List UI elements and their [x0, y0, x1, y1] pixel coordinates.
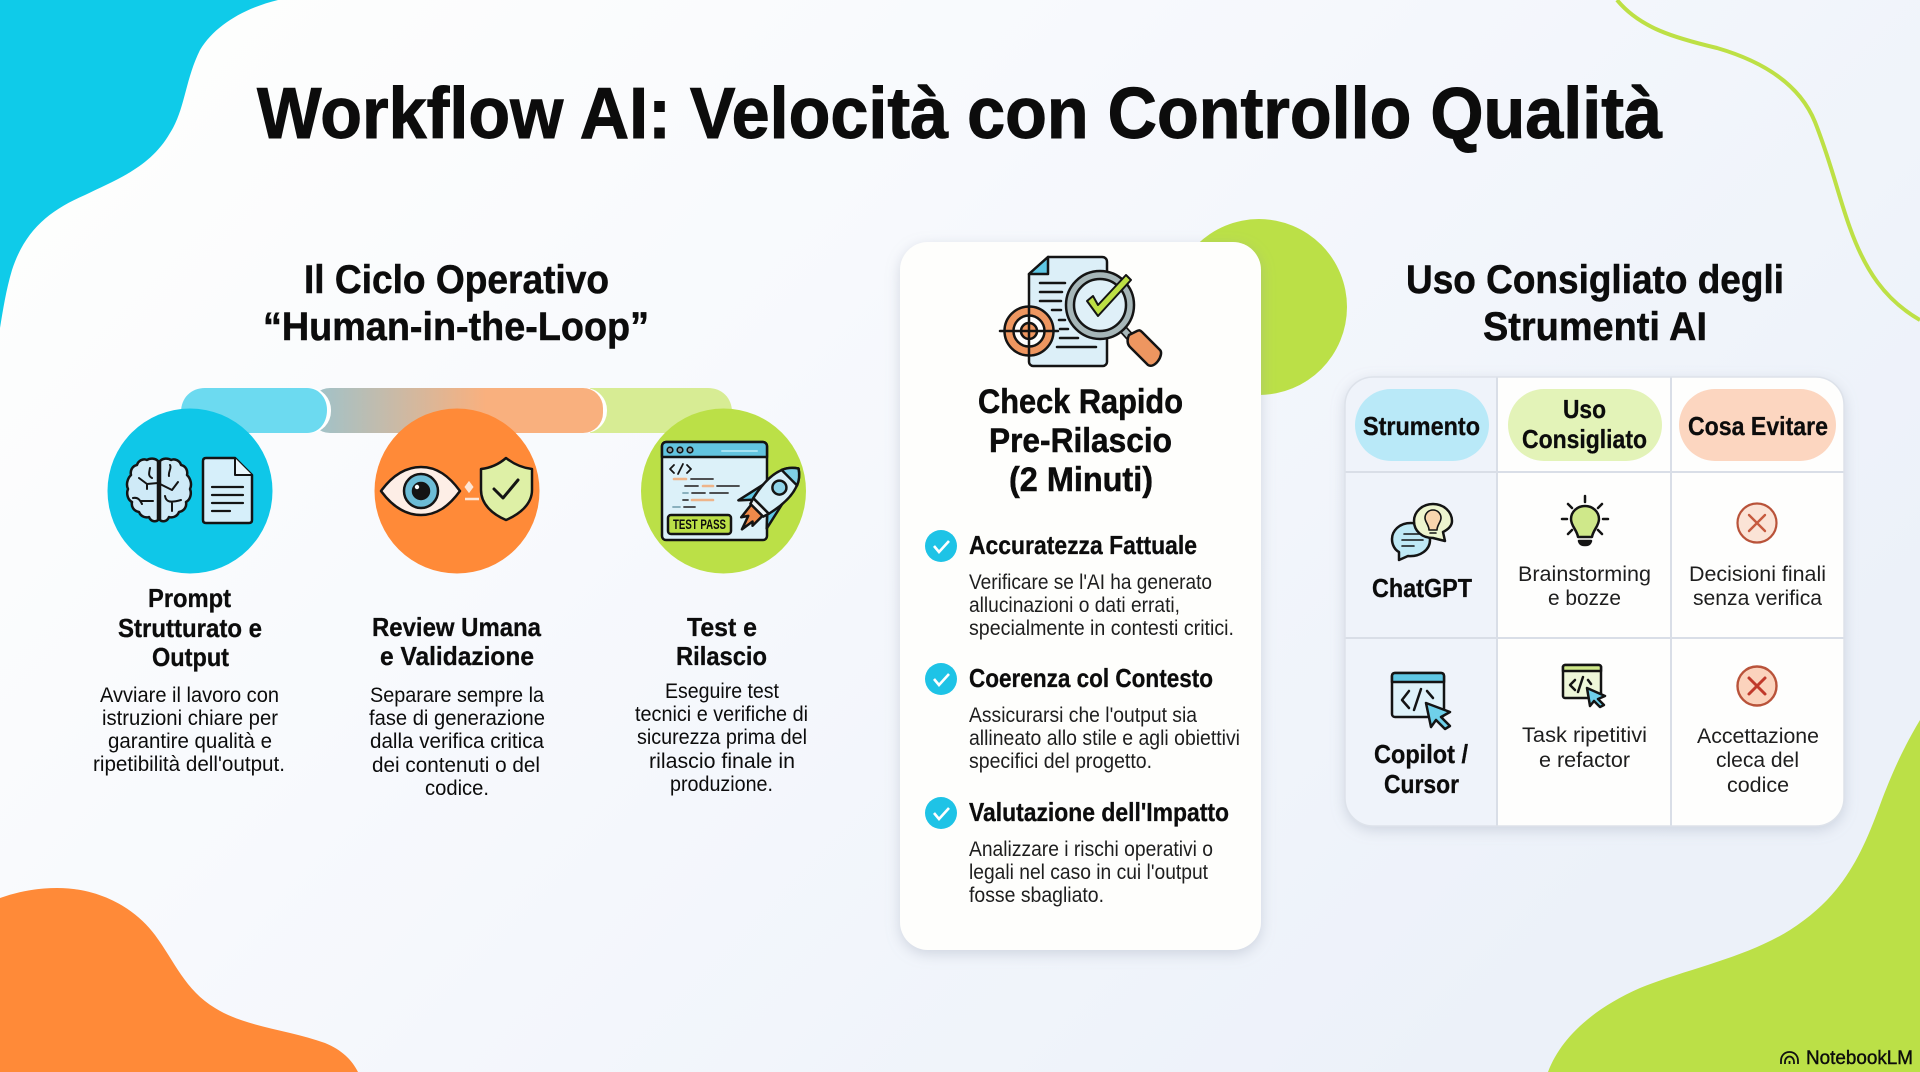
icon: red cross: [1738, 666, 1776, 706]
check item: coerenza: Coerenza col Contesto: [969, 663, 1213, 693]
icon: chat bubbles: [1392, 504, 1452, 560]
step 3 title: Test e: [687, 612, 757, 642]
process connector band: [181, 388, 732, 433]
step 1 circle with brain and document icon: [108, 408, 272, 574]
step 2 circle with eye and shield icon: [374, 408, 540, 574]
icon: red cross: [1738, 504, 1776, 542]
step 2 title: Review Umana: [372, 612, 541, 642]
check item: impatto: fosse sbagliato.: [969, 884, 1104, 907]
heading: ciclo operativo: Il Ciclo Operativo: [304, 258, 609, 302]
row: copilot tool: Cursor: [1384, 769, 1459, 799]
row: copilot avoid: codice: [1727, 774, 1789, 797]
decorative blob: top left cyan: [0, 0, 278, 328]
step 1 title: [118, 583, 262, 672]
check item: accuratezza: specialmente in contesti critici.: [969, 617, 1234, 640]
label: test pass: TEST PASS: [673, 517, 726, 532]
decorative line: top right green: [1617, 0, 1920, 320]
step 1 title: Output: [152, 642, 229, 672]
card heading: [978, 383, 1183, 499]
card heading: Pre-Rilascio: [989, 422, 1172, 460]
step 3 description: produzione.: [670, 773, 773, 796]
step 2 description: dalla verifica critica: [370, 730, 544, 753]
step 3 description: sicurezza prima del: [637, 726, 807, 749]
step 2 description: codice.: [425, 777, 489, 800]
heading: ciclo operativo: [263, 258, 649, 349]
icon: brain: [127, 459, 191, 521]
card heading: Check Rapido: [978, 383, 1183, 421]
icon: connector marks: [465, 483, 479, 499]
check item: accuratezza: Accuratezza Fattuale: [969, 530, 1197, 560]
row: copilot avoid: Accettazione: [1697, 725, 1819, 748]
icon: document with target and magnifier: [1000, 257, 1161, 366]
icon: document: [203, 458, 252, 523]
icon: light bulb: [1562, 496, 1608, 545]
row: chatgpt avoid: Decisioni finali: [1689, 563, 1826, 586]
step 1 description: ripetibilità dell'output.: [93, 753, 285, 776]
row: copilot use: [1522, 665, 1647, 772]
decorative blob: bottom left orange: [0, 888, 358, 1072]
card heading: (2 Minuti): [1009, 461, 1153, 499]
heading: uso consigliato: Strumenti AI: [1483, 305, 1707, 349]
step 3 description: tecnici e verifiche di: [635, 703, 808, 726]
icon: code window with cursor: [1392, 673, 1450, 729]
check item: coerenza: [925, 663, 1240, 773]
row: chatgpt use: [1518, 496, 1651, 610]
step 1 description: [93, 684, 285, 776]
step 3 description: [635, 680, 808, 796]
panel: check rapido card: [900, 242, 1261, 950]
row: copilot use: e refactor: [1539, 749, 1630, 772]
step 3 description: rilascio finale in: [649, 750, 795, 773]
step 2 description: fase di generazione: [369, 707, 545, 730]
row: copilot tool: Copilot /: [1374, 739, 1468, 769]
icon: shield: [481, 458, 532, 520]
check item: impatto: Valutazione dell'Impatto: [969, 797, 1229, 827]
step 1 description: istruzioni chiare per: [102, 707, 278, 730]
table header: cosa evitare: [1679, 389, 1836, 461]
step 3 circle with browser and rocket icon: [641, 408, 813, 574]
check item: coerenza: allineato allo stile e agli obiettivi: [969, 727, 1240, 750]
decorative blob: bottom right green: [1548, 720, 1920, 1072]
step 1 title: Strutturato e: [118, 613, 262, 643]
step 2 description: [369, 684, 545, 800]
row: chatgpt avoid: senza verifica: [1693, 587, 1822, 610]
title: Workflow AI: Velocità con Controllo Qualità: [257, 74, 1663, 154]
icon: eye: [381, 467, 460, 515]
check item: accuratezza: Verificare se l'AI ha generato: [969, 571, 1212, 594]
row: copilot avoid: cleca del: [1716, 749, 1799, 772]
notebooklm watermark: NotebookLM: [1806, 1048, 1913, 1069]
decorative circle: green behind card: [1171, 219, 1347, 395]
step 2 description: dei contenuti o del: [372, 754, 540, 777]
table header: uso consigliato: Uso: [1563, 394, 1606, 424]
row: chatgpt tool: [1372, 504, 1472, 603]
step 3 description: Eseguire test: [665, 680, 779, 703]
table header: strumento: [1355, 389, 1489, 461]
check item: coerenza: specifici del progetto.: [969, 750, 1152, 773]
check item: accuratezza: allucinazioni o dati errati,: [969, 594, 1180, 617]
icon: browser window: [662, 442, 767, 540]
icon: small code window with cursor: [1563, 665, 1605, 707]
row: copilot use: Task ripetitivi: [1522, 724, 1647, 747]
heading: uso consigliato: Uso Consigliato degli: [1406, 258, 1784, 302]
panel: tools table: [1345, 377, 1844, 826]
check item: coerenza: Assicurarsi che l'output sia: [969, 704, 1197, 727]
step 1 text: [93, 583, 285, 776]
heading: uso consigliato: [1406, 258, 1784, 349]
step 1 description: Avviare il lavoro con: [100, 684, 279, 707]
row: chatgpt avoid: [1689, 504, 1826, 610]
step 3 text: [635, 612, 808, 796]
check item: impatto: [925, 797, 1229, 907]
table header: uso consigliato: Consigliato: [1522, 424, 1647, 454]
heading: ciclo operativo: “Human-in-the-Loop”: [263, 305, 649, 349]
row: copilot tool: [1374, 673, 1468, 799]
row: copilot avoid: [1697, 666, 1819, 797]
row: chatgpt tool: ChatGPT: [1372, 573, 1472, 603]
check item: impatto: legali nel caso in cui l'output: [969, 861, 1208, 884]
step 3 title: [676, 612, 767, 671]
step 3 title: Rilascio: [676, 641, 767, 671]
check item: impatto: Analizzare i rischi operativi o: [969, 838, 1213, 861]
check item: accuratezza: [925, 530, 1234, 640]
table header: cosa evitare: Cosa Evitare: [1688, 411, 1828, 441]
step 2 title: [372, 612, 541, 671]
step 2 description: Separare sempre la: [370, 684, 544, 707]
step 2 title: e Validazione: [380, 641, 534, 671]
table header: uso consigliato: [1508, 389, 1662, 461]
table header: strumento: Strumento: [1363, 411, 1480, 441]
row: chatgpt use: Brainstorming: [1518, 563, 1651, 586]
row: chatgpt use: e bozze: [1548, 587, 1621, 610]
icon: rocket: [726, 454, 813, 541]
step 1 title: Prompt: [148, 583, 231, 613]
step 1 description: garantire qualità e: [108, 730, 272, 753]
step 2 text: [369, 612, 545, 800]
